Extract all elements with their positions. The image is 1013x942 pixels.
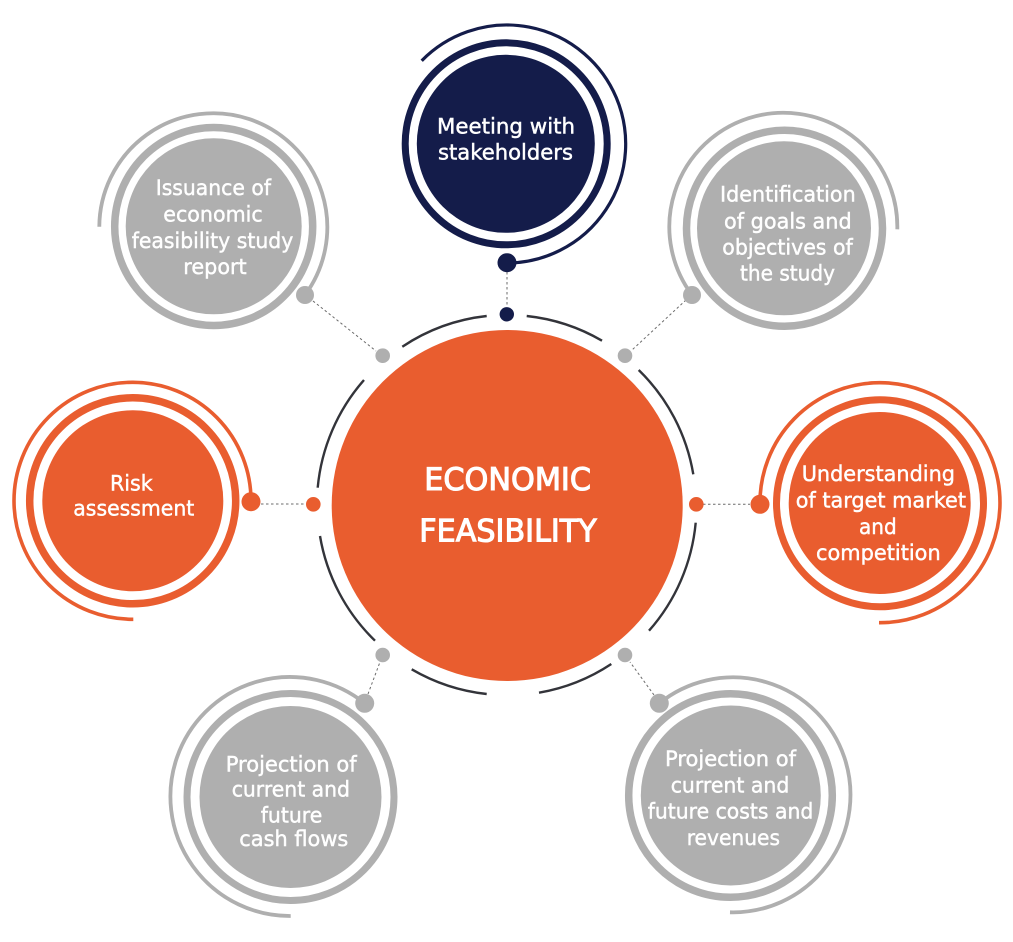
connector <box>630 662 654 695</box>
hub title <box>419 462 597 550</box>
outer arc <box>422 25 626 263</box>
node: understanding of target market <box>689 383 1000 623</box>
hub dot <box>500 307 514 321</box>
node: risk assessment <box>14 382 321 619</box>
connector <box>261 503 306 505</box>
end dot <box>750 495 770 514</box>
connector <box>368 662 380 694</box>
label: current and <box>232 778 350 803</box>
hub dot <box>375 348 390 363</box>
hub circle <box>332 330 683 681</box>
outer arc <box>170 677 365 916</box>
label: cash flows <box>239 827 348 852</box>
thick ring <box>776 400 984 607</box>
thick ring <box>30 398 236 604</box>
hub dot <box>306 497 321 512</box>
connector <box>313 301 376 351</box>
label: and <box>859 515 897 540</box>
disc <box>200 706 382 888</box>
outer arc <box>99 113 327 295</box>
label: Projection of <box>226 753 357 778</box>
hub dot <box>618 348 632 363</box>
node: meeting with stakeholders <box>405 25 626 321</box>
label: Identification <box>720 183 856 208</box>
label: economic <box>163 203 263 228</box>
end dot <box>683 286 701 304</box>
disc <box>641 706 821 886</box>
label: feasibility study <box>132 229 294 254</box>
disc <box>126 138 302 314</box>
label: Meeting with <box>437 114 575 139</box>
disc <box>417 55 595 233</box>
end dot <box>650 694 669 713</box>
label: Understanding <box>802 462 955 487</box>
hub title: FEASIBILITY <box>419 514 597 550</box>
outer arc <box>760 383 1000 623</box>
label: of target market <box>796 488 966 513</box>
connector <box>632 300 686 350</box>
thick ring <box>115 128 313 326</box>
label: future costs and <box>648 799 813 824</box>
end dot <box>242 492 260 511</box>
hub dot <box>618 648 632 662</box>
disc <box>42 410 223 591</box>
connector <box>703 503 750 505</box>
disc <box>697 141 871 315</box>
end dot <box>296 286 314 304</box>
label <box>226 753 357 852</box>
label: stakeholders <box>438 140 573 165</box>
label: objectives of <box>722 235 853 260</box>
label: competition <box>816 541 941 566</box>
label: revenues <box>687 826 780 851</box>
label <box>796 462 966 566</box>
node: identification of goals <box>618 113 897 363</box>
outer arc <box>669 113 897 295</box>
hub title: ECONOMIC <box>424 462 591 498</box>
label: assessment <box>73 496 194 521</box>
node: projection of cash flows <box>170 648 394 916</box>
label <box>720 183 856 287</box>
central hub <box>318 316 696 694</box>
outer arc <box>14 382 251 619</box>
label: Issuance of <box>156 176 271 201</box>
node: projection of costs and revenues <box>618 648 850 912</box>
label <box>437 114 575 165</box>
end dot <box>498 253 516 272</box>
label <box>648 747 813 851</box>
thick ring <box>405 43 607 245</box>
label <box>132 176 294 280</box>
outer arc <box>659 677 850 912</box>
label: Projection of <box>665 747 796 772</box>
label: report <box>183 255 247 280</box>
label: current and <box>671 773 789 798</box>
label: future <box>261 803 322 828</box>
label: Risk <box>110 472 153 497</box>
segmented ring around hub <box>318 316 696 694</box>
label: of goals and <box>724 209 852 234</box>
hub dot <box>689 497 704 512</box>
connector <box>506 272 508 307</box>
label: the study <box>740 262 835 287</box>
disc <box>789 412 971 594</box>
node: issuance of report <box>99 113 390 363</box>
thick ring <box>187 694 394 900</box>
thick ring <box>686 130 882 326</box>
thick ring <box>629 694 832 897</box>
end dot <box>355 694 374 713</box>
hub dot <box>375 648 390 662</box>
label <box>73 472 194 521</box>
